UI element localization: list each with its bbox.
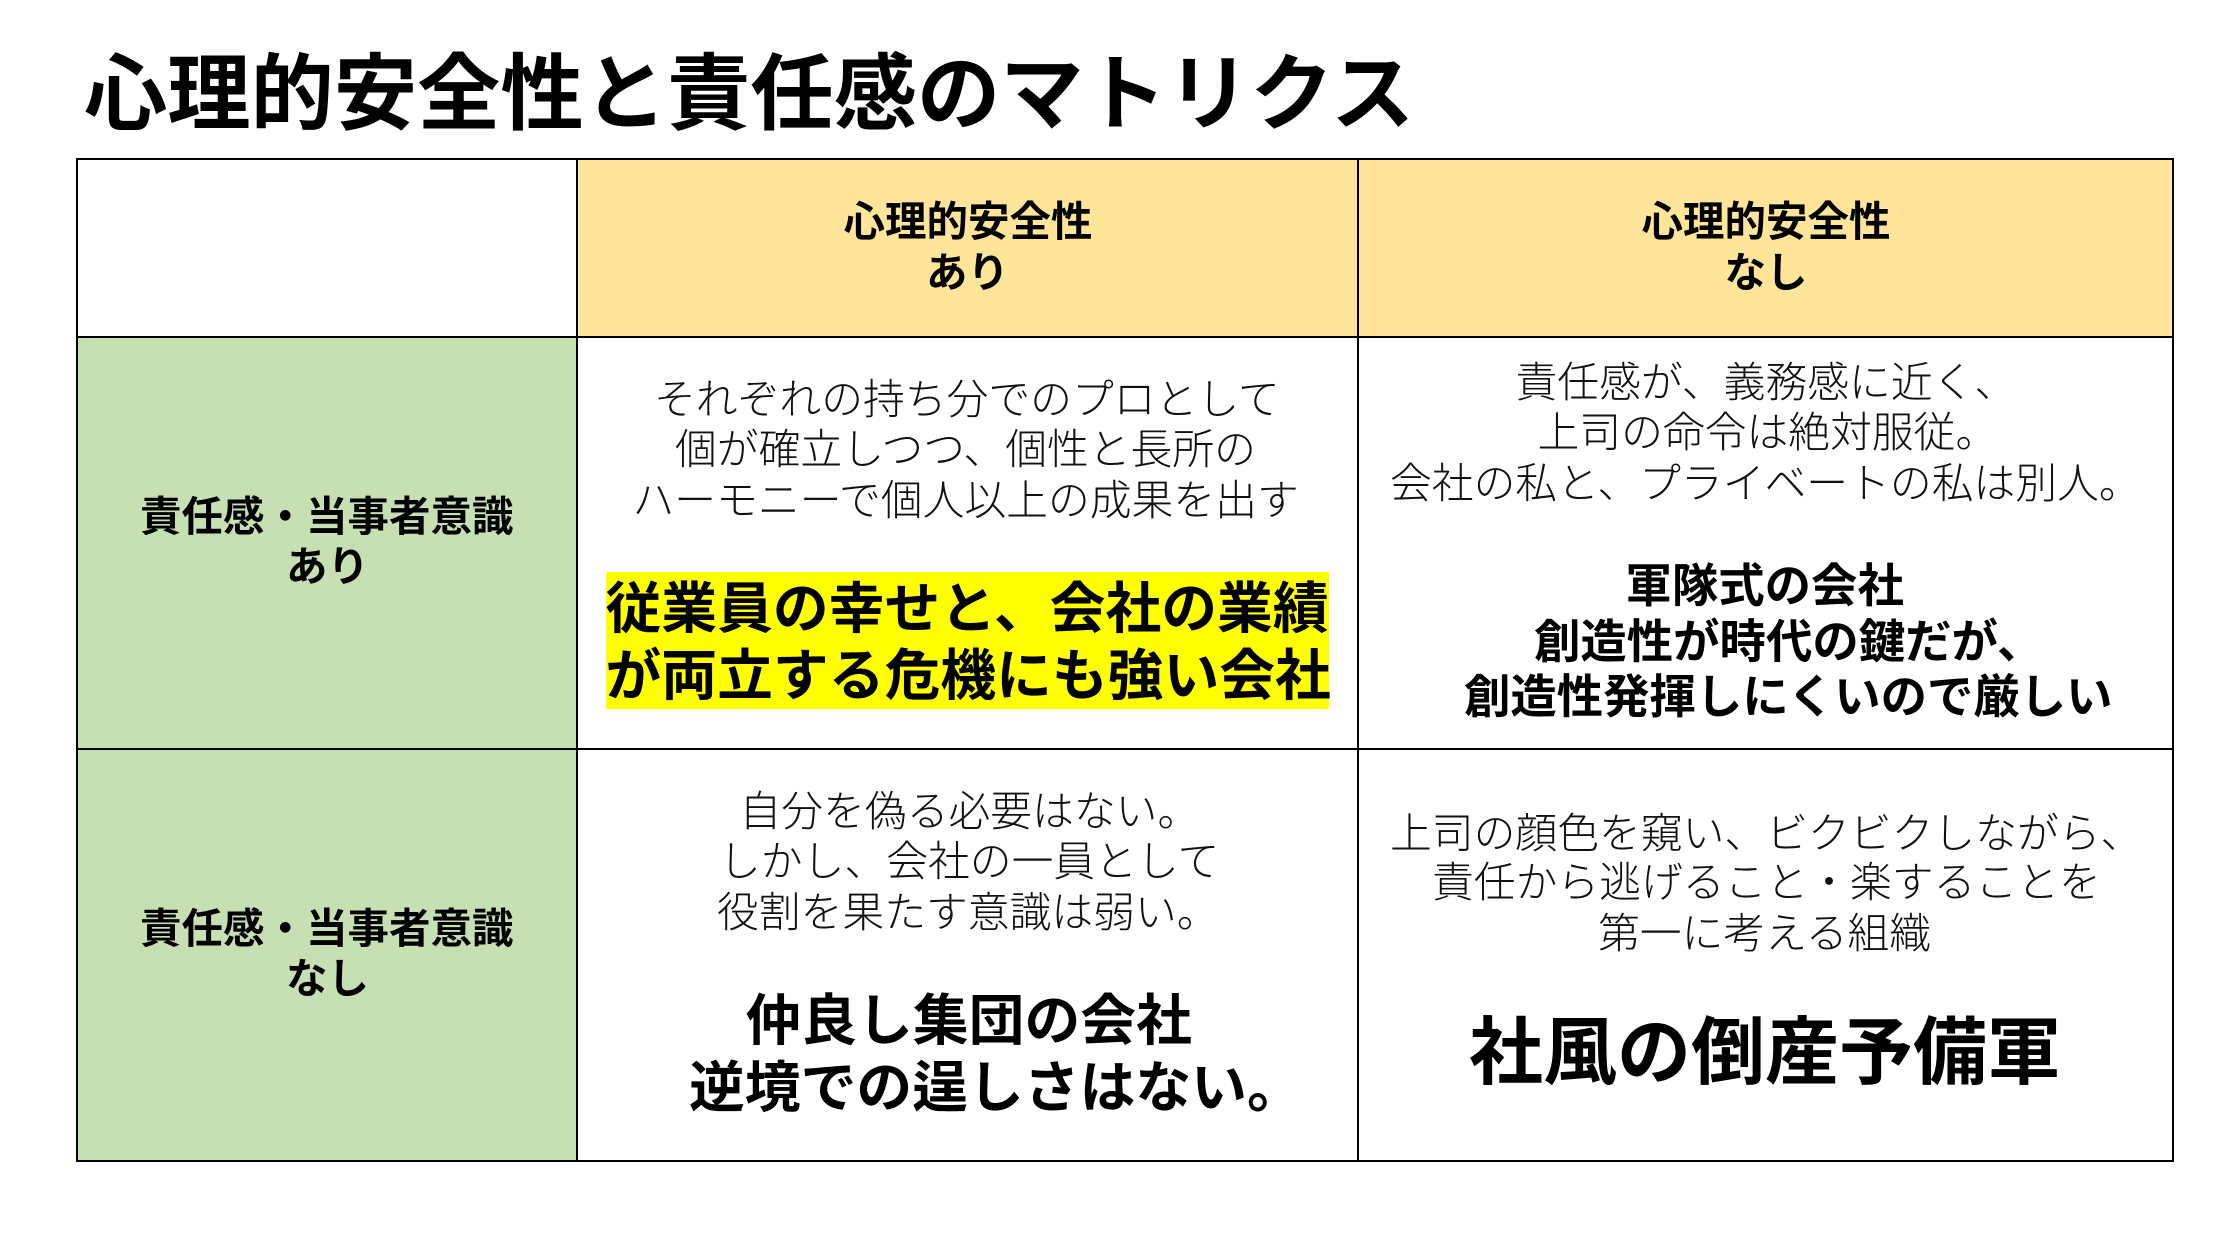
description text: それぞれの持ち分でのプロとして	[654, 376, 1280, 422]
row header: responsibility present: あり	[286, 542, 369, 590]
column header: psychological safety present: あり	[926, 248, 1009, 296]
row header: responsibility absent: 責任感・当事者意識	[140, 904, 514, 952]
conclusion: military-style company: 創造性が時代の鍵だが、	[1534, 616, 2043, 668]
column header: psychological safety absent	[1357, 158, 2174, 338]
conclusion: pre-bankruptcy culture: 社風の倒産予備軍	[1469, 1010, 2061, 1094]
column header: psychological safety present: 心理的安全性	[844, 198, 1093, 244]
conclusion: military-style company: 軍隊式の会社	[1626, 560, 1904, 612]
title: 心理的安全性と責任感のマトリクス	[84, 48, 1414, 141]
description text: 個が確立しつつ、個性と長所の	[675, 426, 1256, 473]
highlighted conclusion	[606, 572, 1328, 708]
empty corner cell	[76, 158, 578, 338]
description text: 上司の顔色を窺い、ビクビクしながら、	[1390, 810, 2142, 856]
conclusion: military-style company	[1464, 560, 2113, 723]
description text	[1390, 810, 2142, 957]
cell: safety absent, responsibility absent	[1357, 748, 2174, 1162]
column header: psychological safety absent: 心理的安全性	[1642, 198, 1891, 244]
description text: 会社の私と、プライベートの私は別人。	[1390, 460, 2141, 506]
row header: responsibility absent: なし	[286, 954, 369, 1002]
cell: safety present, responsibility present	[576, 336, 1360, 750]
description text: ハーモニーで個人以上の成果を出す	[632, 476, 1299, 524]
description text: 責任から逃げること・楽することを	[1432, 859, 2101, 906]
highlighted conclusion: 従業員の幸せと、会社の業績	[606, 577, 1329, 640]
description text	[1390, 359, 2141, 506]
column header: psychological safety absent: なし	[1724, 248, 1808, 296]
row header: responsibility present: 責任感・当事者意識	[140, 492, 514, 540]
row header: responsibility present	[76, 336, 578, 750]
column header: psychological safety present	[576, 158, 1360, 338]
conclusion: friendly group company: 逆境での逞しさはない。	[689, 1056, 1303, 1119]
description text: しかし、会社の一員として	[719, 838, 1219, 885]
description text: 第一に考える組織	[1598, 910, 1931, 957]
highlighted conclusion: が両立する危機にも強い会社	[606, 644, 1331, 706]
description text: 役割を果たす意識は弱い。	[717, 888, 1219, 936]
description text	[717, 788, 1219, 936]
conclusion: military-style company: 創造性発揮しにくいので厳しい	[1464, 671, 2113, 723]
row header: responsibility absent	[76, 748, 578, 1162]
cell: safety present, responsibility absent	[576, 748, 1360, 1162]
conclusion: friendly group company	[689, 989, 1303, 1119]
conclusion: friendly group company: 仲良し集団の会社	[746, 989, 1192, 1052]
description text	[632, 376, 1299, 524]
description text: 責任感が、義務感に近く、	[1516, 359, 2016, 406]
cell: safety absent, responsibility present	[1357, 336, 2174, 750]
description text: 上司の命令は絶対服従。	[1538, 409, 1997, 456]
description text: 自分を偽る必要はない。	[740, 788, 1199, 834]
